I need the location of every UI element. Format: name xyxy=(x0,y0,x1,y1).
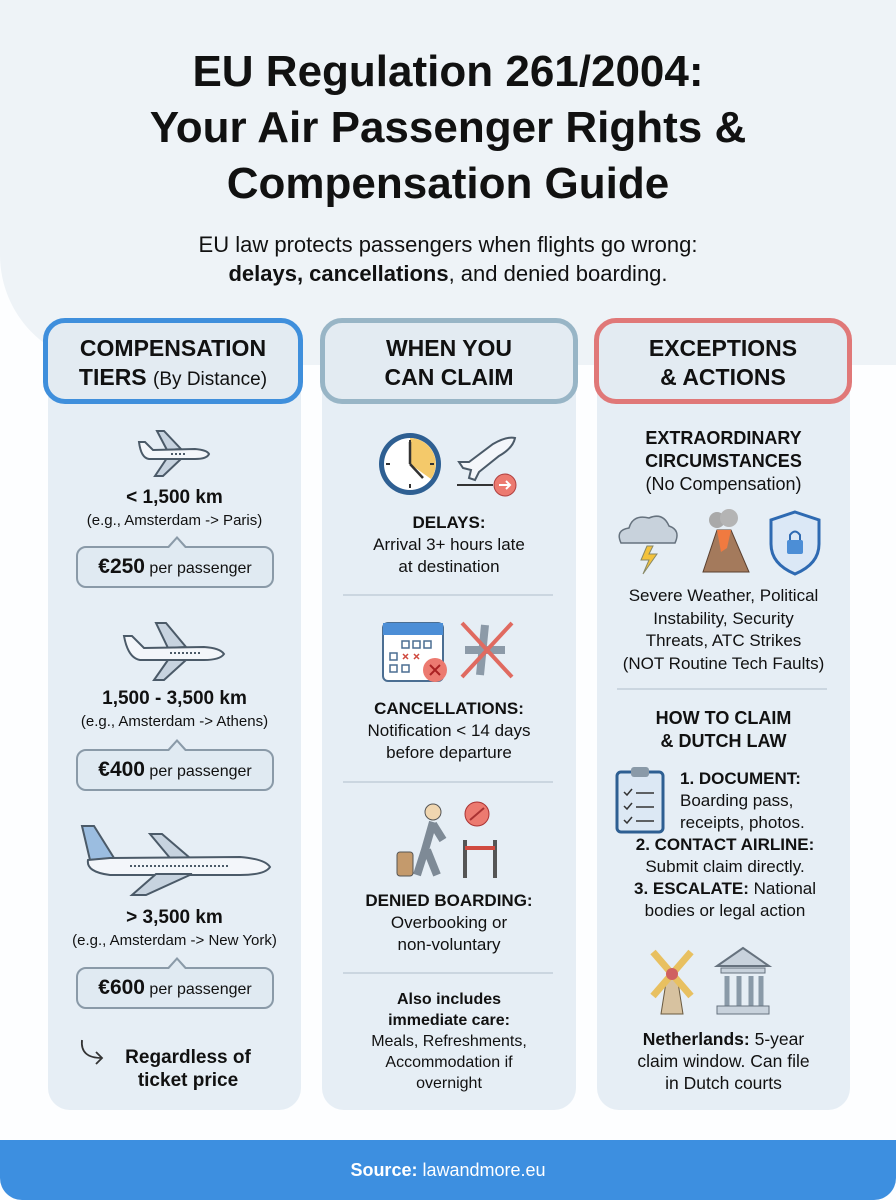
text: immediate care: Accommodation if xyxy=(385,1054,513,1071)
heading: exceptions & actions: & ACTIONS xyxy=(660,364,786,390)
subtitle: delays, cancellations, and denied boarding. xyxy=(228,261,668,286)
subtitle: EU law protects passengers when flights go wrong: xyxy=(199,232,697,257)
heading: compensation tiers xyxy=(43,318,303,404)
text: steps: 3. ESCALATE: National xyxy=(634,879,816,898)
text: exception list: Threats, ATC Strikes xyxy=(646,631,801,650)
text: tier 3: (e.g., Amsterdam -> New York) xyxy=(72,932,277,949)
text: exception list xyxy=(623,586,824,672)
panel: compensation tiers xyxy=(48,360,301,1110)
text: tier 1: (e.g., Amsterdam -> Paris) xyxy=(87,512,262,529)
heading: compensation tiers: COMPENSATION xyxy=(80,335,266,361)
icon: clock and plane xyxy=(379,433,516,496)
text: steps: 2. CONTACT AIRLINE: xyxy=(636,835,814,854)
heading: how to claim: & DUTCH LAW xyxy=(660,731,786,751)
footer: source: Source: lawandmore.eu xyxy=(350,1160,546,1180)
text: exception list: (NOT Routine Tech Faults) xyxy=(623,654,824,672)
text: tier 1 xyxy=(87,487,262,529)
price: 250: €250 per passenger xyxy=(98,555,252,578)
price: 400: €400 per passenger xyxy=(98,758,252,781)
text: steps xyxy=(634,769,816,920)
text: immediate care: Meals, Refreshments, xyxy=(371,1033,527,1050)
text: tier 2 xyxy=(81,688,268,730)
text: extraordinary circumstances xyxy=(645,428,802,494)
footer: source xyxy=(0,1140,896,1200)
text: steps: receipts, photos. xyxy=(680,813,805,832)
text: steps: Boarding pass, xyxy=(680,791,793,810)
text: steps: Submit claim directly. xyxy=(645,857,805,876)
note: regardless of ticket price xyxy=(80,1040,251,1091)
text: delays: DELAYS: xyxy=(412,513,486,532)
icon: plane medium xyxy=(122,622,226,681)
panel: when you can claim xyxy=(322,360,576,1110)
text: steps: bodies or legal action xyxy=(645,901,805,920)
text: cancellations: before departure xyxy=(386,743,512,762)
text: delays: Arrival 3+ hours late xyxy=(373,535,525,554)
icon: denied boarding xyxy=(396,802,497,878)
title xyxy=(150,47,746,208)
heading: exceptions & actions xyxy=(594,318,852,404)
text: exception list: Instability, Security xyxy=(653,608,794,628)
text: cancellations: CANCELLATIONS: xyxy=(374,699,524,718)
price: 400 xyxy=(76,749,274,791)
heading: when you can claim: CAN CLAIM xyxy=(384,364,514,390)
heading: when you can claim xyxy=(320,318,578,404)
text: denied boarding: non-voluntary xyxy=(397,935,500,954)
title: Compensation Guide xyxy=(227,159,669,208)
price: 250 xyxy=(76,546,274,588)
text: tier 2: 1,500 - 3,500 km xyxy=(102,688,247,709)
text: cancellations xyxy=(367,699,530,762)
price: 600 xyxy=(76,967,274,1009)
text: immediate care xyxy=(371,991,527,1092)
text: netherlands: Netherlands: 5-year xyxy=(643,1029,804,1049)
text: tier 3 xyxy=(72,907,277,949)
text: tier 2: (e.g., Amsterdam -> Athens) xyxy=(81,713,268,730)
icon: clipboard xyxy=(616,767,664,834)
text: netherlands: in Dutch courts xyxy=(665,1073,782,1093)
header background xyxy=(0,0,896,365)
text: denied boarding: Overbooking or xyxy=(391,913,507,932)
text: cancellations: Notification < 14 days xyxy=(367,721,530,740)
text: steps: 1. DOCUMENT: xyxy=(680,769,801,788)
panel: exceptions xyxy=(597,360,850,1110)
subtitle xyxy=(199,232,697,286)
text: exception list: Severe Weather, Political xyxy=(629,586,818,605)
text: netherlands: claim window. Can file xyxy=(637,1051,810,1071)
text: denied boarding xyxy=(365,891,533,954)
price: 600: €600 per passenger xyxy=(98,976,252,999)
text: immediate care: overnight xyxy=(416,1075,482,1092)
note: regardless of ticket price: ticket price xyxy=(138,1070,238,1091)
text: tier 3: > 3,500 km xyxy=(126,907,223,928)
text: immediate care: immediate care: xyxy=(388,1012,510,1029)
heading: compensation tiers: TIERS (By Distance) xyxy=(79,364,267,390)
text: extraordinary circumstances: EXTRAORDINARY xyxy=(645,428,802,448)
note: regardless of ticket price: Regardless of xyxy=(125,1047,251,1068)
icon: calendar and crossed plane xyxy=(382,622,514,682)
title: EU Regulation 261/2004: xyxy=(192,47,704,96)
title: Your Air Passenger Rights & xyxy=(150,103,746,152)
icons: weather volcano shield xyxy=(618,509,820,576)
icon: plane small xyxy=(138,430,210,477)
icons: windmill and court xyxy=(650,946,772,1014)
heading: how to claim xyxy=(656,708,791,751)
text: extraordinary circumstances: CIRCUMSTANCES xyxy=(645,451,802,471)
icon: plane large xyxy=(80,825,272,896)
heading: when you can claim: WHEN YOU xyxy=(386,335,512,361)
text: denied boarding: DENIED BOARDING: xyxy=(365,891,533,910)
heading: exceptions & actions: EXCEPTIONS xyxy=(649,335,797,361)
text: delays: at destination xyxy=(398,557,500,576)
text: netherlands xyxy=(637,1029,810,1093)
text: delays xyxy=(373,513,525,576)
heading: how to claim: HOW TO CLAIM xyxy=(656,708,791,728)
text: extraordinary circumstances: (No Compensation) xyxy=(645,474,802,494)
text: tier 1: < 1,500 km xyxy=(126,487,223,508)
text: immediate care: Also includes xyxy=(397,991,501,1008)
